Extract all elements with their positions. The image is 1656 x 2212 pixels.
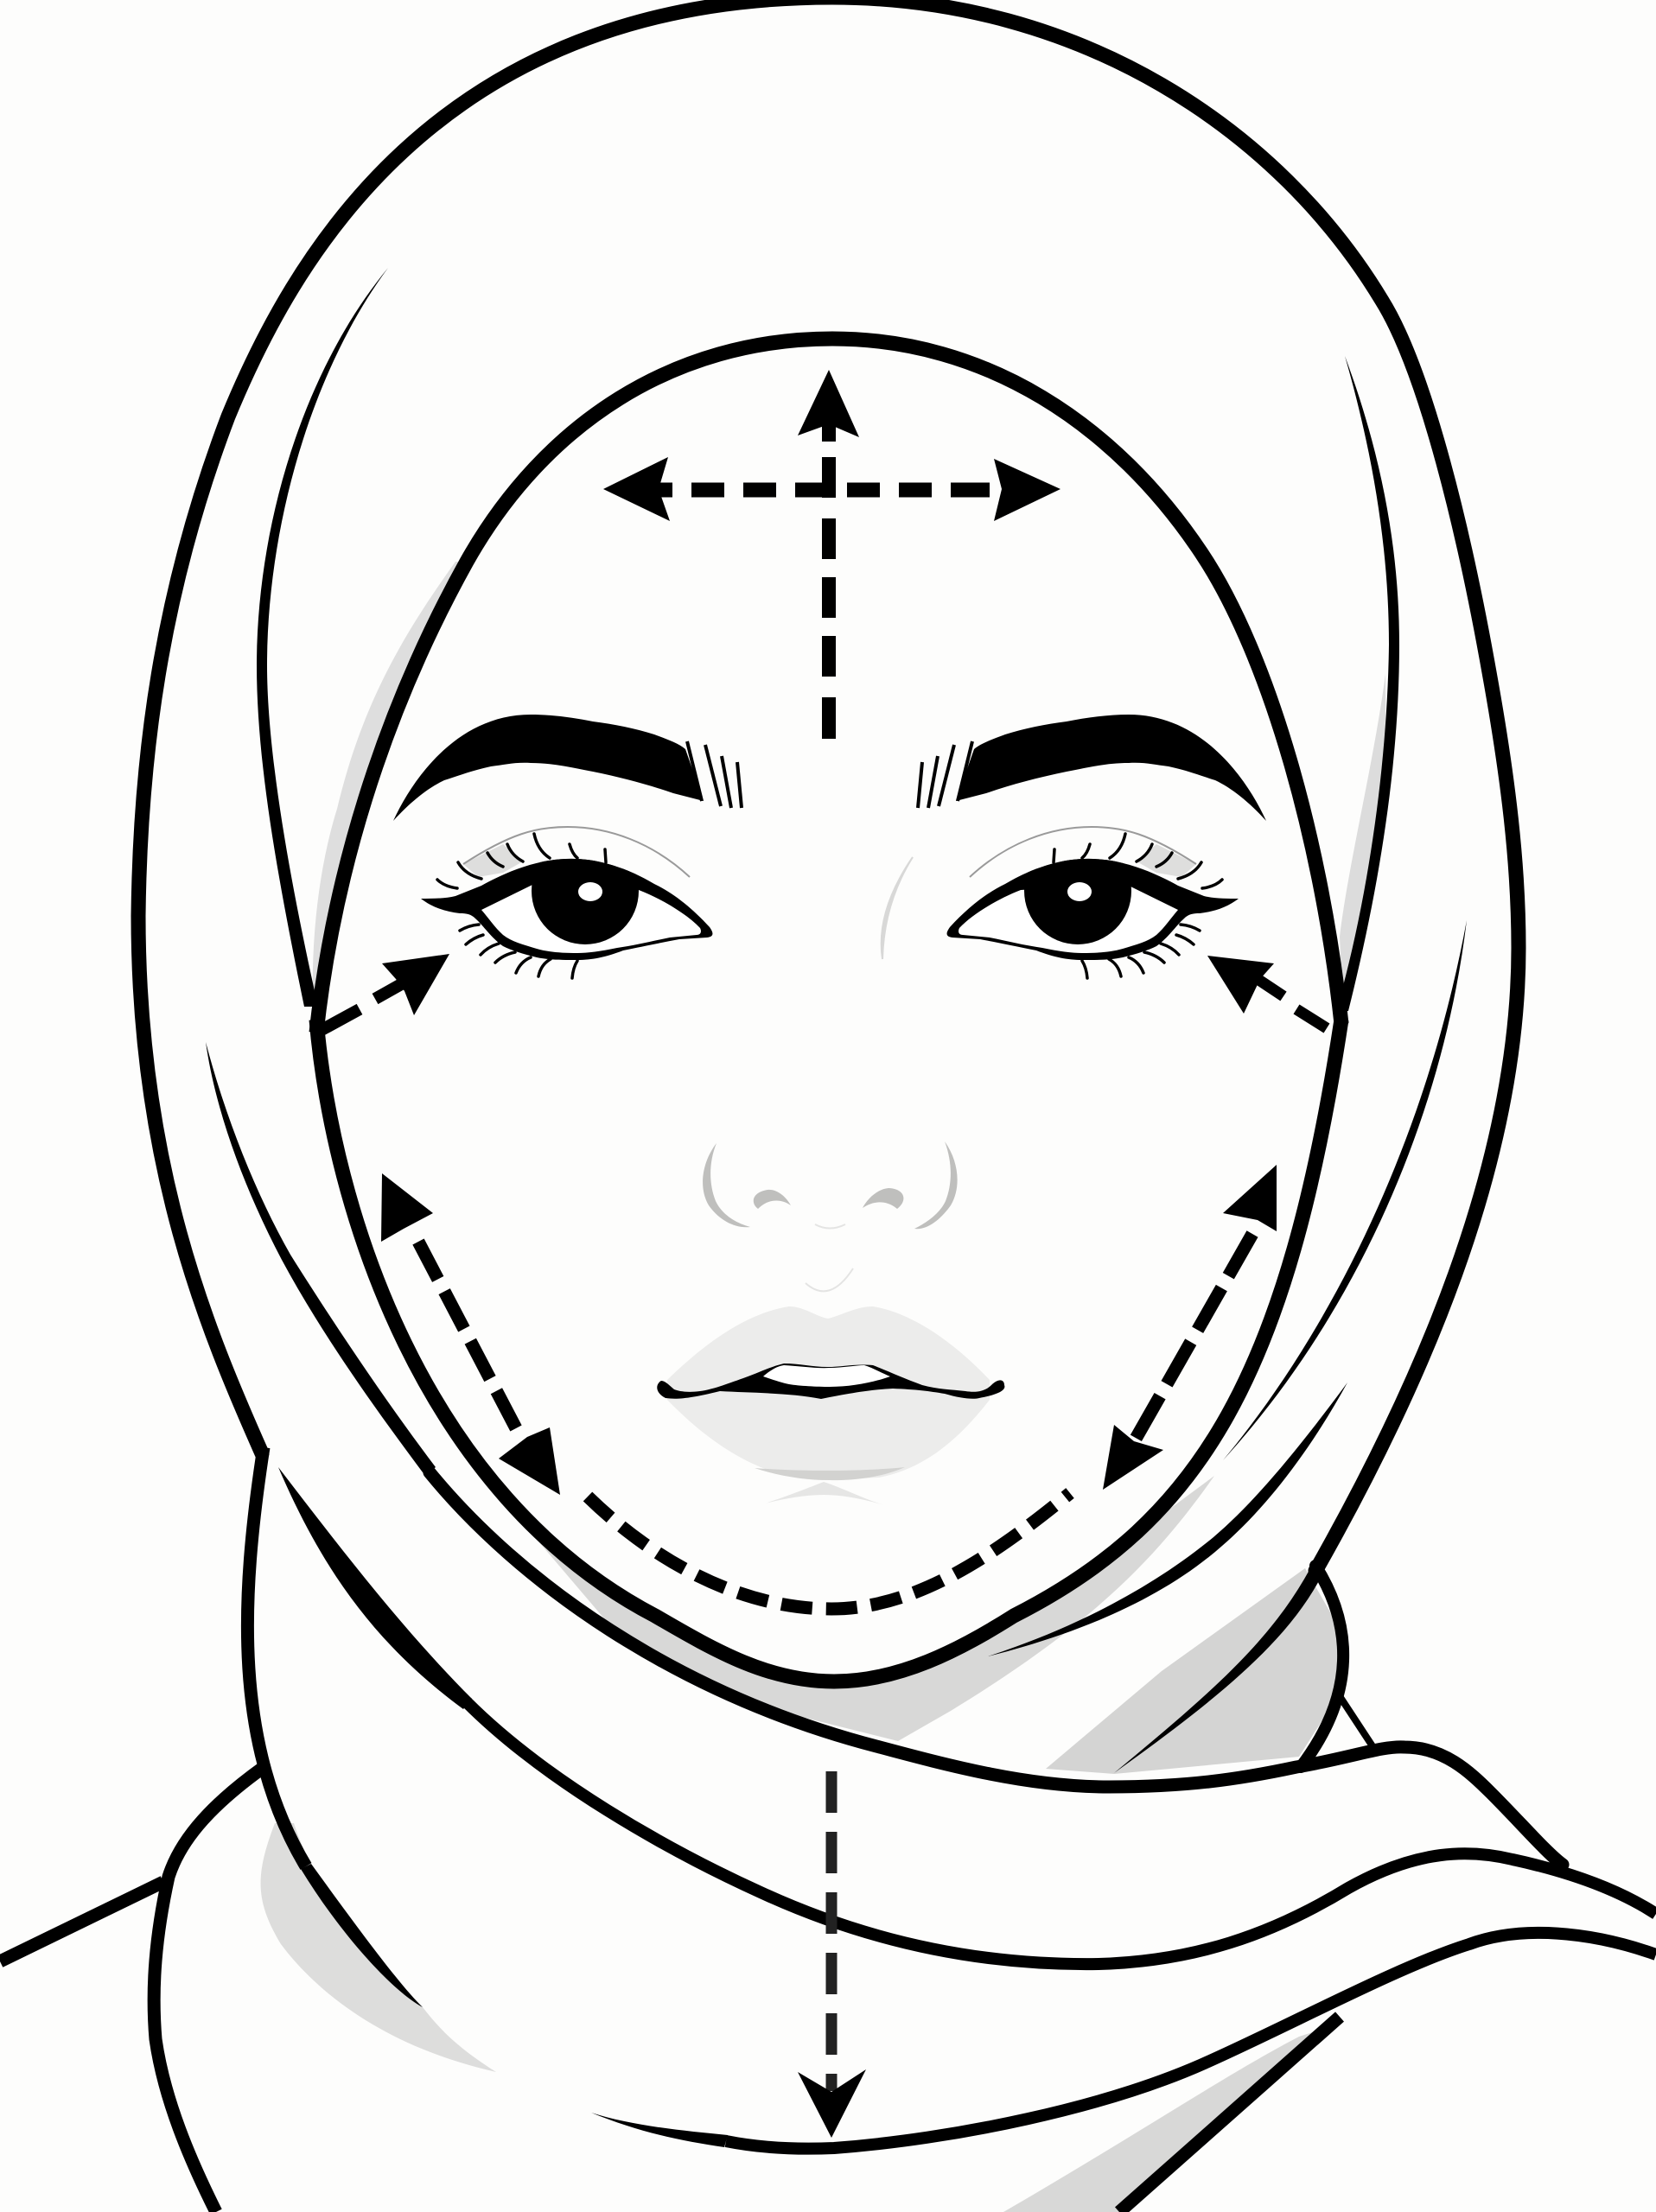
left shoulder line xyxy=(0,1882,163,1961)
nose bridge shade xyxy=(882,857,913,959)
right neck lines xyxy=(1114,1566,1374,1773)
arrow: right temple xyxy=(1207,956,1327,1028)
lips xyxy=(657,1306,1004,1505)
nose xyxy=(703,1141,958,1229)
arrow: forehead horizontal xyxy=(603,457,1060,521)
hijab outer outline xyxy=(138,0,1519,1571)
arrow: left jaw xyxy=(381,1173,560,1495)
scarf crease xyxy=(278,1467,1656,1964)
right eyebrow xyxy=(918,715,1266,821)
arrow: neck vertical xyxy=(798,1771,866,2138)
right eye xyxy=(947,827,1239,978)
right chest line xyxy=(1119,2017,1340,2212)
shadows on scarf xyxy=(261,562,1385,2212)
arrow: chin curve xyxy=(588,1493,1070,1609)
left shoulder scarf xyxy=(154,1768,263,2212)
nose tip and philtrum xyxy=(806,1224,853,1291)
arrow: right jaw xyxy=(1103,1165,1277,1490)
scarf upper fold xyxy=(430,1472,1563,1865)
arrow: forehead vertical xyxy=(798,370,859,739)
left eyebrow xyxy=(393,715,742,821)
scarf lower drape xyxy=(591,1933,1656,2149)
arrow: left temple xyxy=(322,954,449,1030)
face outline: lower xyxy=(316,1020,1341,1681)
neck left outline xyxy=(247,1447,423,2007)
face outline: upper xyxy=(316,339,1341,1033)
left eye xyxy=(421,827,712,978)
hijab inner folds xyxy=(206,268,1467,1656)
